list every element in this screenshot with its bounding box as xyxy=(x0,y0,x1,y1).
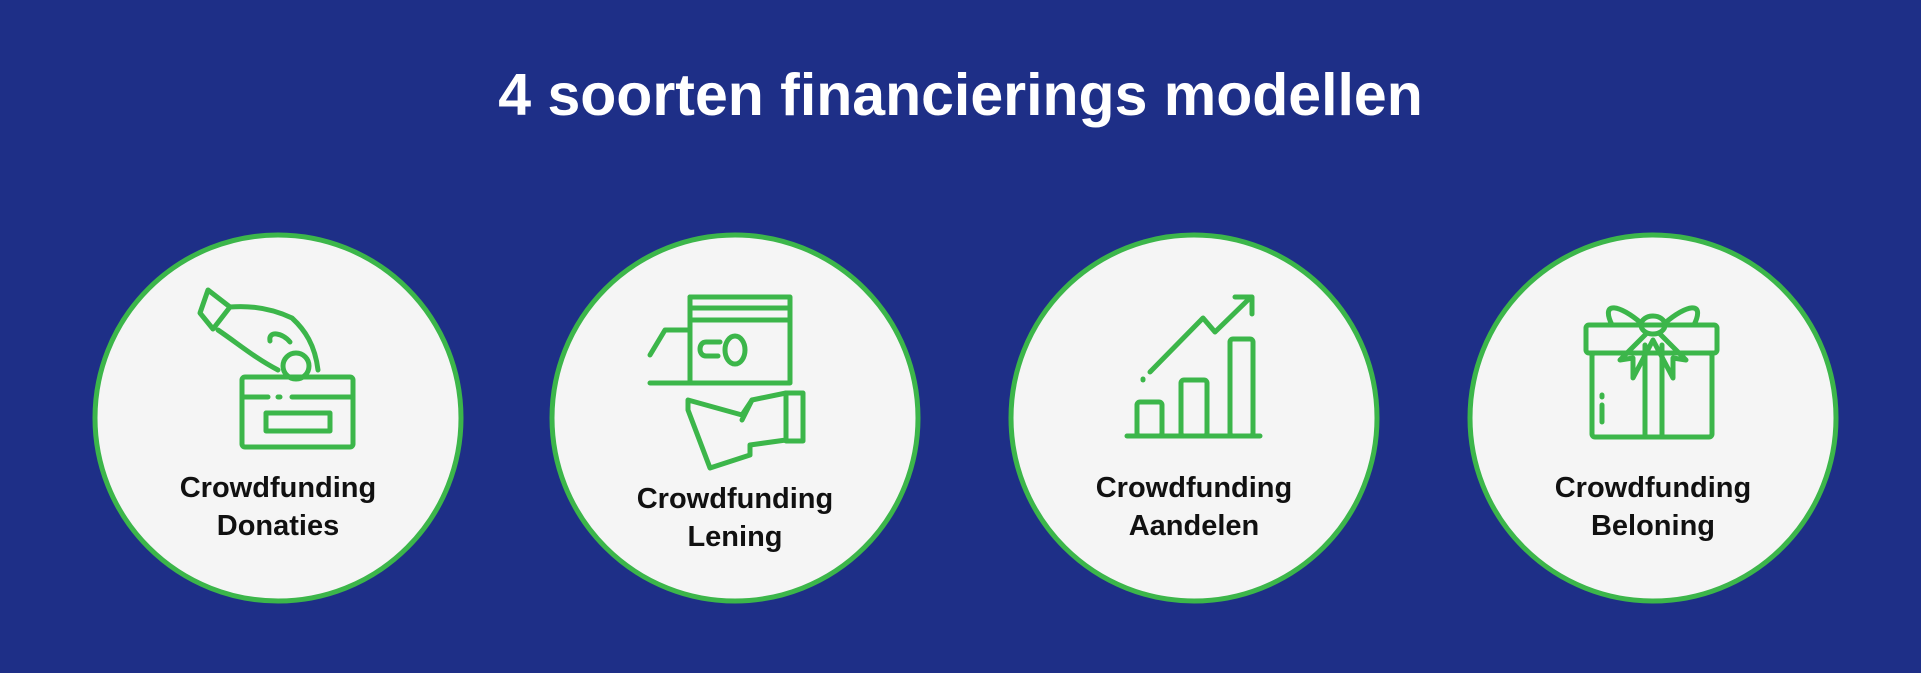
icon: money and hand xyxy=(650,297,803,468)
panel: lening: Lening xyxy=(687,521,783,553)
icon: hand with coin into box xyxy=(200,290,353,447)
panel: aandelen xyxy=(1011,235,1377,601)
panel: donaties: Donaties xyxy=(217,510,339,542)
label: Crowdfunding xyxy=(1555,472,1751,504)
label: Crowdfunding xyxy=(1096,472,1292,504)
panel: aandelen: Aandelen xyxy=(1129,510,1259,542)
panel: donaties xyxy=(95,235,461,601)
panel: beloning xyxy=(1470,235,1836,601)
title: 4 soorten financierings modellen xyxy=(498,62,1423,128)
label: Crowdfunding xyxy=(180,472,376,504)
panel: beloning: Beloning xyxy=(1591,510,1715,542)
label: Crowdfunding xyxy=(637,483,833,515)
icon: bar chart with arrow xyxy=(1127,297,1260,436)
icon: gift xyxy=(1586,308,1717,437)
panel: lening xyxy=(552,235,918,601)
